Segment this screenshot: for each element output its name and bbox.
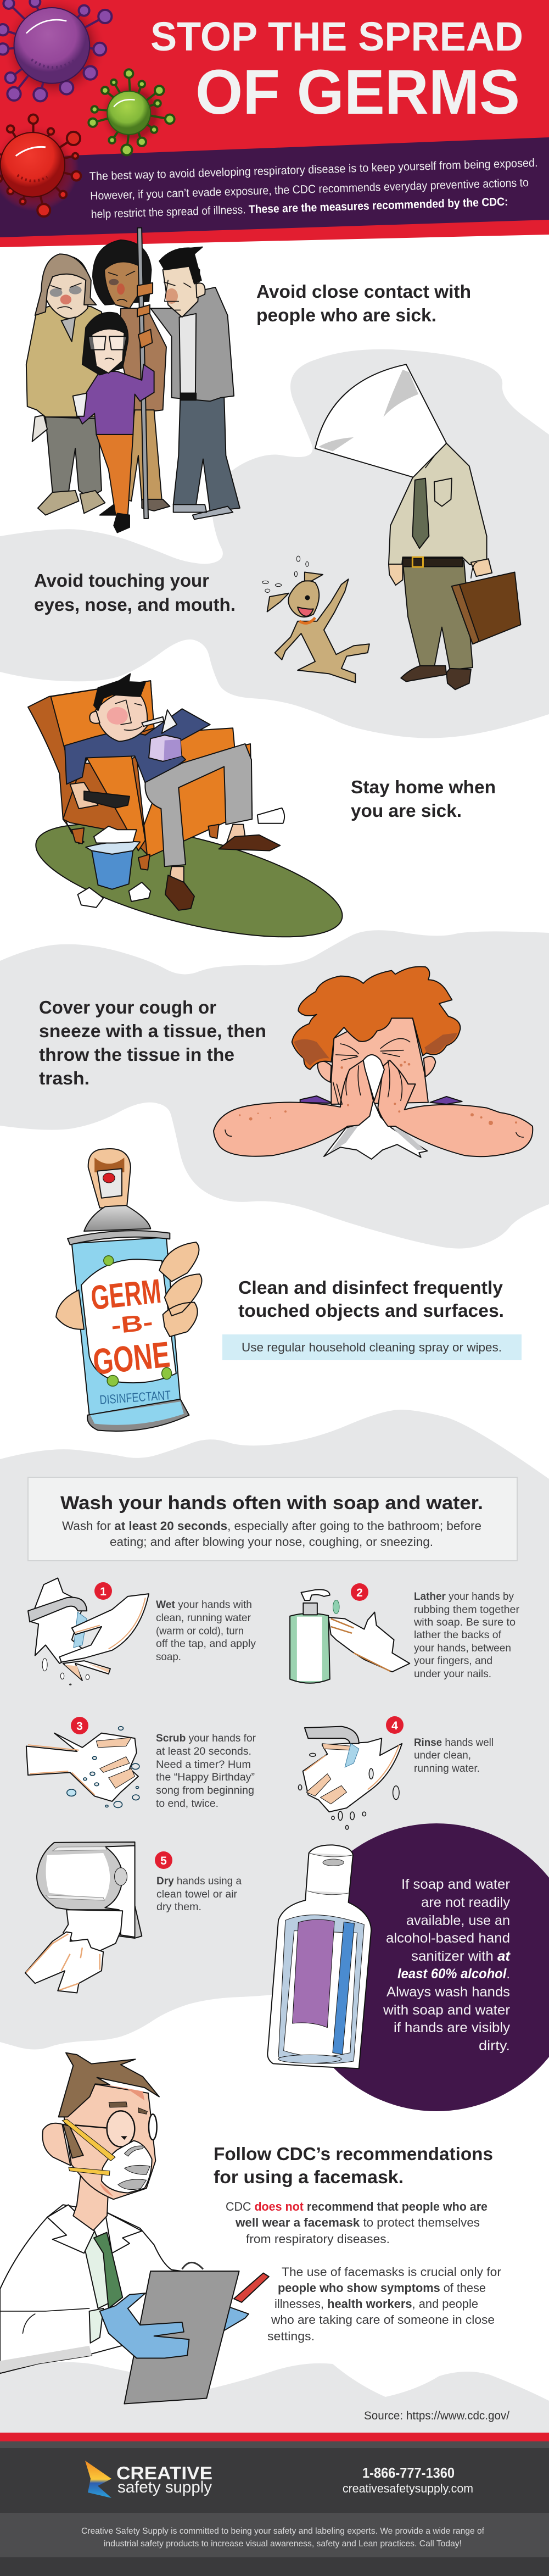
panel: avoid touching face [34,364,520,689]
company statement: industrial safety products to increase visual awareness, safety and Lean practices. Call Today! [104,2539,462,2549]
sanitizer text: with soap and water [383,2002,510,2018]
icon: red germ [0,115,81,216]
icon: green germ [88,69,175,155]
sanitizer text: Always wash hands [386,1984,510,2000]
icon: germs [0,0,175,216]
heading: cover cough: sneeze with a tissue, then [39,1021,266,1041]
armchair [28,681,252,870]
step 2 text: under your nails. [414,1668,491,1680]
step 3 text: to end, twice. [156,1798,219,1810]
background: grey wave above footer [0,2362,549,2433]
glasses [75,2111,157,2147]
step 2: lather [290,1583,520,1683]
step 2 text: lather the backs of [414,1629,502,1641]
logo wordmark: CREATIVE [116,2463,212,2483]
illustration: dog [262,556,369,682]
facemask guidance: who should wear [267,2265,501,2343]
step number 5 [155,1851,172,1869]
heading: cover cough: trash. [39,1068,89,1088]
red strip [0,2433,549,2441]
head [42,2053,159,2230]
step 5 text [156,1876,242,1913]
waste bin with tissues [78,826,150,908]
step number 5: 5 [160,1855,167,1867]
tissue over nose [363,1055,384,1100]
finger on nozzle [88,1149,131,1208]
hair [292,966,460,1070]
heading: facemask: Follow CDC’s recommendations [214,2144,493,2164]
step number 4 [386,1716,404,1734]
neck and face [331,1018,428,1104]
man body [65,674,280,910]
title: STOP THE SPREAD [150,14,523,59]
step 5 text: dry them. [156,1901,201,1913]
facemask guidance: does not recommend: from respiratory diseases. [246,2232,390,2246]
pole [137,228,148,519]
panel: facemask [0,2053,509,2422]
icon: scrubbing hands with bubbles [26,1727,139,1807]
front woman [73,283,154,532]
callout: household cleaner tip: Use regular household cleaning spray or wipes. [242,1340,502,1354]
trousers and shoes [402,560,473,670]
heading: cover cough: throw the tissue in the [39,1044,234,1065]
intro text [89,157,538,221]
can lettering: GERM [89,1272,163,1317]
small germs on can [104,1256,172,1386]
sanitizer text: dirty. [479,2038,510,2054]
brows [109,2102,147,2114]
header panel [0,0,549,247]
label [81,1259,176,1383]
step 3 text: Need a timer? Hum [156,1759,251,1771]
sanitizer text: least 60% alcohol. [397,1966,510,1982]
sanitizer text: If soap and water [401,1877,510,1892]
panel: hand sanitizer callout [267,1823,549,2111]
heading: facemask [214,2144,493,2187]
panel: cover your cough [39,966,533,1159]
icon: briefcase [452,563,520,644]
wash hands description: Wash for at least 20 seconds, especially after going to the bathroom; before [62,1519,481,1533]
step 4: rinse [298,1716,494,1829]
wash hands description: eating; and after blowing your nose, coughing, or sneezing. [110,1535,433,1549]
panel: avoid close contact [26,228,471,532]
icon: soap pump and hand [290,1590,410,1683]
logo wordmark: safety supply [117,2478,212,2496]
step 1 text [156,1599,256,1663]
step 1 text: soap. [156,1651,181,1663]
heading: cover cough [39,997,266,1088]
step 3: scrub [26,1717,256,1810]
facemask guidance: does not recommend [226,2200,488,2246]
logo icon [85,2461,111,2498]
contact details: 1-866-777-1360 [362,2464,455,2481]
right hand and arm [378,1060,533,1156]
step number 3: 3 [76,1720,83,1733]
can dome [84,1205,150,1231]
clipboard, gloves and pen [100,2262,269,2404]
purple circle background [293,1823,549,2111]
panel: clean and disinfect [56,1149,522,1431]
icon: hands under tap [28,1578,149,1685]
can lettering [89,1272,172,1382]
shirt [389,443,487,575]
illustration: sick man in armchair [26,674,352,960]
tie [412,479,429,548]
source: Source: https://www.cdc.gov/ [364,2410,509,2422]
heading: avoid close contact: Avoid close contact with [256,281,471,302]
step 2 text: Lather your hands by [414,1591,514,1603]
title [150,14,523,127]
step 1 text: off the tap, and apply [156,1638,256,1650]
step number 2: 2 [356,1587,363,1599]
facemask guidance: does not recommend: well wear a facemask to protect themselves [235,2216,480,2229]
facemask guidance: who should wear: settings. [267,2329,315,2343]
step 3 text: song from beginning [156,1785,254,1796]
heading: cover cough: Cover your cough or [39,997,216,1017]
contact details: creativesafetysupply.com [343,2482,473,2495]
hair [59,2053,159,2117]
facemask guidance: who should wear: illnesses, health workers, and people [274,2297,478,2311]
step 4 text: running water. [414,1763,480,1774]
left hand and arm [214,1060,373,1156]
illustration: man with cone on head [315,364,520,689]
illustration: sneezing person [214,966,533,1159]
step 1 text: clean, running water [156,1612,251,1624]
step 3 text: Scrub your hands for [156,1733,256,1744]
background: grey wave behind touching section [0,349,549,738]
right man [150,247,240,519]
step 1 text: Wet your hands with [156,1599,252,1611]
sanitizer text: sanitizer with at [411,1949,511,1964]
step 3 text: at least 20 seconds. [156,1746,251,1757]
hand fingers [56,1290,84,1329]
facemask guidance: who should wear: people who show symptoms of these [278,2281,486,2295]
icon: towel dispenser and hands [25,1842,142,1993]
step 2 text [413,1591,520,1680]
can body [72,1237,180,1415]
facemask guidance: does not recommend: CDC does not recommend that people who are [226,2200,488,2213]
step 3 text [156,1733,256,1810]
step 2 text: with soap. Be sure to [413,1617,516,1628]
lampshade cone [315,364,446,477]
step 5 text: Dry hands using a [156,1876,242,1887]
facemask guidance: who should wear: The use of facemasks is crucial only for [282,2265,501,2279]
heading: avoid touching: eyes, nose, and mouth. [34,594,236,615]
mask [102,2141,152,2193]
heading: stay home [351,777,496,821]
rug [26,801,352,960]
logo wordmark [116,2463,212,2496]
freckles [239,1061,517,1125]
step 1 text: (warm or cold), turn [156,1626,244,1637]
red header background [0,0,549,247]
icon: rinsing hands under tap [298,1727,402,1829]
step number 1 [94,1582,112,1600]
callout: household cleaner tip [222,1334,522,1360]
step 3 text: the “Happy Birthday” [156,1772,255,1783]
panel: stay home [26,674,496,960]
heading: clean and disinfect [238,1277,504,1321]
sanitizer text: are not readily [421,1895,510,1910]
intro text: help restrict the spread of illness. These are the measures recommended by the CDC: [91,196,508,221]
footer [0,2433,549,2576]
step 4 text: Rinse hands well [414,1737,494,1749]
heading: wash hands: Wash your hands often with soap and water. [60,1493,483,1514]
contact details [343,2464,473,2495]
heading: avoid touching: Avoid touching your [34,570,209,591]
sanitizer text: if hands are visibly [394,2020,511,2035]
closed eyes and brows [336,1038,410,1060]
heading: avoid close contact: people who are sick. [256,305,436,325]
step 4 text: under clean, [414,1750,471,1761]
illustration: sanitizer bottle [267,1845,371,2068]
facemask guidance: who should wear: who are taking care of someone in close [271,2313,495,2327]
background: grey wave behind hand washing section [0,1410,549,2049]
illustration: doctor with mask and clipboard [0,2053,269,2404]
neck [73,2176,108,2230]
step 2 text: your hands, between [414,1643,511,1654]
background: grey wave behind cough section [0,930,549,1249]
step number 2 [351,1583,368,1601]
tissue lower [324,1100,427,1159]
heading: stay home: you are sick. [351,800,462,821]
illustration: group of sick people [26,228,240,532]
sanitizer text: available, use an [406,1913,510,1928]
step number 3 [71,1717,88,1734]
step 5: dry [25,1842,242,1993]
icon: purple germ [0,0,111,101]
heading: avoid close contact [256,281,471,325]
face [64,2084,155,2199]
step 2 text: your fingers, and [414,1655,492,1667]
step 1: wet hands [28,1578,256,1685]
intro text: However, if you can’t evade exposure, the CDC recommends everyday preventive actions to [90,176,529,202]
company statement [81,2527,485,2549]
wash hands description [62,1519,481,1549]
can lettering: GONE [91,1334,172,1382]
step 5 text: clean towel or air [156,1889,238,1900]
sanitizer text: alcohol-based hand [386,1930,510,1946]
can lettering: -B- [110,1309,154,1339]
illustration: spray can: DISINFECTANT [99,1388,171,1407]
step number 4: 4 [391,1720,398,1732]
heading: clean and disinfect: touched objects and surfaces. [238,1300,504,1321]
purple intro band [0,137,549,237]
heading: avoid touching [34,570,236,615]
heading: facemask: for using a facemask. [214,2167,404,2187]
ears [317,1056,435,1082]
cup [257,808,284,824]
ear [42,2123,70,2166]
panel: wash your hands heading [28,1477,517,1561]
belt [402,558,463,566]
title: OF GERMS [195,57,520,127]
step 4 text [414,1737,494,1774]
illustration: spray can [56,1149,202,1431]
left man [26,254,105,515]
heading: stay home: Stay home when [351,777,496,797]
lab coat [0,2205,210,2373]
company statement: Creative Safety Supply is committed to being your safety and labeling experts. We provide a wide range of [81,2527,485,2536]
back woman [93,240,170,511]
yellow mask straps [62,2119,115,2176]
step number 1: 1 [100,1585,107,1598]
heading: clean and disinfect: Clean and disinfect frequently [238,1277,503,1298]
fingers [225,1060,523,1137]
shoulders [300,1096,462,1104]
step 2 text: rubbing them together [414,1604,520,1616]
sanitizer text [383,1877,511,2054]
